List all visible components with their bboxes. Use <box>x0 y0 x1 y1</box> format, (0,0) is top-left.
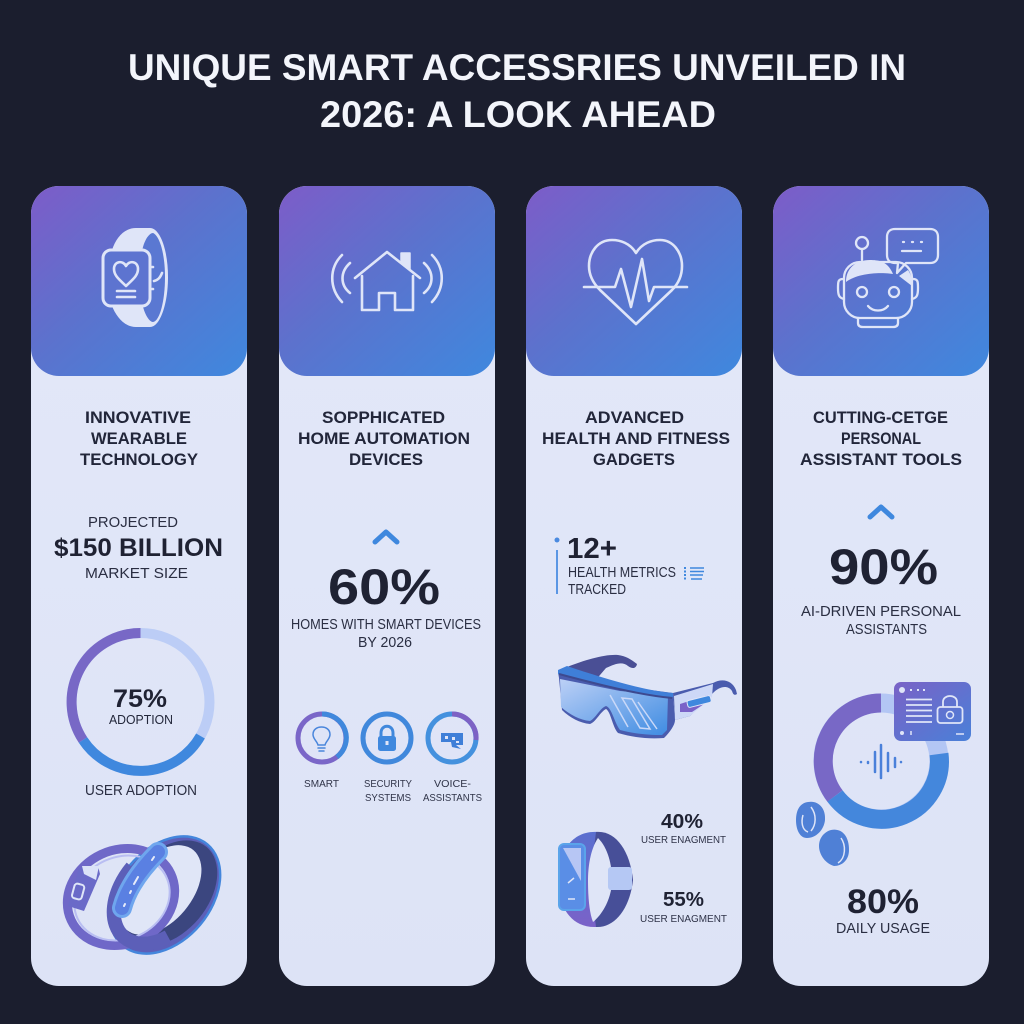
icon labels: SYSTEMS <box>365 792 411 804</box>
stat: 90% assistants: AI-DRIVEN PERSONAL <box>801 604 961 620</box>
panel header: home <box>279 186 495 376</box>
illustration: earbuds <box>796 802 849 866</box>
panel: wearable technology <box>31 186 247 986</box>
donut chart: 75% adoption <box>72 633 210 771</box>
stat: market size <box>54 515 223 582</box>
heading: PERSONAL <box>841 430 921 448</box>
icon: smart bulb <box>298 714 346 762</box>
icon: up chevron <box>870 507 892 517</box>
stat: 55% engagement: USER ENAGMENT <box>640 913 728 925</box>
panel header: assistant <box>773 186 989 376</box>
icon: smartwatch <box>103 228 168 327</box>
heading <box>80 409 198 469</box>
heading: TECHNOLOGY <box>80 451 198 469</box>
stat: market size: MARKET SIZE <box>85 566 188 582</box>
donut chart: 75% adoption: ADOPTION <box>109 713 173 727</box>
stat: market size: PROJECTED <box>88 515 178 531</box>
heading: CUTTING-CETGE <box>813 409 948 427</box>
stat: 12+ metrics: HEALTH METRICS <box>568 565 676 581</box>
icon labels: VOICE- <box>434 778 472 790</box>
heading: HEALTH AND FITNESS <box>542 430 730 448</box>
stat: daily usage <box>836 883 930 937</box>
icon: smart home <box>332 252 442 310</box>
icon labels <box>304 778 482 804</box>
stat: 55% engagement <box>640 889 728 925</box>
icon labels: ASSISTANTS <box>423 792 482 804</box>
donut chart: assistants <box>823 703 939 819</box>
panel: health and fitness <box>526 186 742 986</box>
stat: 60% homes: BY 2026 <box>358 635 412 651</box>
stat: 40% engagement: USER ENAGMENT <box>641 834 727 846</box>
illustration: smart glasses <box>558 655 737 738</box>
stat: 40% engagement: 40% <box>661 811 703 833</box>
panel header: wearable <box>31 186 247 376</box>
stat: daily usage: 80% <box>847 883 919 921</box>
title: 2026: A LOOK AHEAD <box>320 94 716 135</box>
panel: personal assistant tools <box>773 186 989 986</box>
heading <box>800 409 962 469</box>
stat: 12+ metrics <box>554 533 704 598</box>
heading: HOME AUTOMATION <box>298 430 470 448</box>
heading: ASSISTANT TOOLS <box>800 451 962 469</box>
stat: 60% homes: 60% <box>328 559 440 615</box>
icon labels: SMART <box>304 778 340 790</box>
caption: user adoption: USER ADOPTION <box>85 783 197 799</box>
card: security panel <box>894 682 971 741</box>
heading: ADVANCED <box>585 409 684 427</box>
stat: 90% assistants: 90% <box>829 539 938 595</box>
stat: 90% assistants <box>801 539 961 638</box>
icon: robot with speech bubble <box>838 229 938 327</box>
icon: security lock <box>363 714 411 762</box>
heading: DEVICES <box>349 451 423 469</box>
heading: INNOVATIVE <box>85 409 191 427</box>
donut chart: 75% adoption: 75% <box>113 685 167 713</box>
stat: daily usage: DAILY USAGE <box>836 921 930 937</box>
title <box>128 47 906 135</box>
icon labels: SECURITY <box>364 778 412 790</box>
heading: GADGETS <box>593 451 675 469</box>
stat: 60% homes <box>291 559 481 651</box>
stat: 12+ metrics: 12+ <box>567 533 617 565</box>
stat: 90% assistants: ASSISTANTS <box>846 622 927 638</box>
panel header: health <box>526 186 742 376</box>
stat: 40% engagement <box>641 811 727 846</box>
stat: 55% engagement: 55% <box>663 889 704 911</box>
icon: heart with pulse <box>584 240 687 324</box>
icon: voice assistant <box>428 714 476 762</box>
stat: market size: $150 BILLION <box>54 534 223 562</box>
stat: 12+ metrics: TRACKED <box>568 582 626 598</box>
icon: up chevron <box>375 532 397 542</box>
illustration: fitness band <box>558 832 633 927</box>
heading <box>542 409 730 469</box>
heading <box>298 409 470 469</box>
panel: home automation <box>279 186 495 986</box>
illustration: smart bands <box>51 815 243 975</box>
stat: 60% homes: HOMES WITH SMART DEVICES <box>291 617 481 633</box>
heading: SOPPHICATED <box>322 409 445 427</box>
heading: WEARABLE <box>91 430 187 448</box>
title: UNIQUE SMART ACCESSRIES UNVEILED IN <box>128 47 906 88</box>
